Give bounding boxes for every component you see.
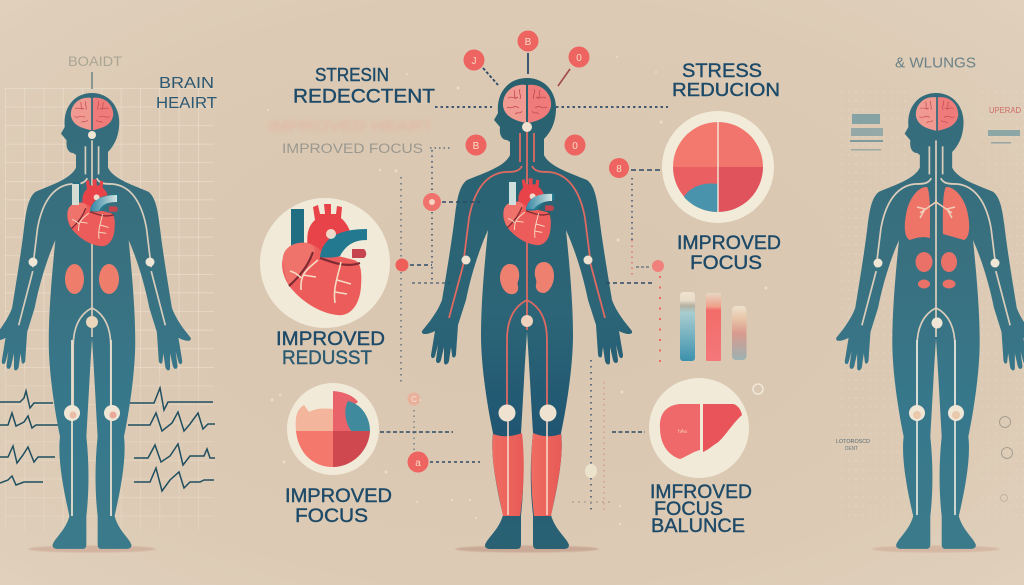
bronchi: [917, 200, 955, 218]
heading: STRESIN: STRESIN: [315, 65, 389, 85]
figure: left body (brain, heart, kidneys): [0, 93, 191, 553]
leg lines: [72, 340, 111, 516]
brain: [916, 97, 958, 131]
ground shadow: [455, 546, 599, 552]
small text: right panel right label: UPERAD: [989, 106, 1021, 115]
badge right of head: 0: [572, 141, 578, 152]
badge left of head: [466, 134, 486, 156]
icon: pie circle upper right: [662, 111, 774, 223]
sock lines: [508, 420, 547, 515]
brain: [503, 85, 551, 123]
pale vessels on heart: [72, 184, 117, 211]
background dots: right panel: [836, 90, 1024, 520]
label: IMPROVED (heart): IMPROVED: [276, 328, 385, 350]
heading: STRESS: STRESS: [682, 61, 762, 82]
ground shadow: [872, 546, 1000, 552]
badge near pie: 8: [616, 164, 622, 175]
lungs: [905, 187, 969, 240]
badge near pie: [609, 158, 629, 178]
joint dots: [874, 258, 1000, 421]
red vessels: [449, 127, 605, 405]
node right: [652, 260, 664, 272]
heart: [67, 179, 118, 246]
silhouette: [836, 93, 1024, 549]
background grid: left panel: [5, 88, 214, 530]
label: BALUNCE: BALUNCE: [651, 516, 745, 537]
heading: REDECCTENT: REDECCTENT: [293, 86, 435, 108]
joint dots: [462, 122, 592, 422]
ECG traces: right: [128, 388, 215, 491]
ECG traces: left: [0, 391, 58, 485]
label: HEAIRT: HEAIRT: [156, 95, 218, 112]
figure: centre body (brain, heart, red socks): [422, 78, 632, 552]
icon: heart in circle: [260, 198, 390, 328]
bar 1: [680, 292, 695, 361]
badge top left: J: [472, 56, 476, 67]
badge left of head: B: [473, 141, 480, 152]
icon: pie circle lower left: [287, 383, 379, 475]
label: IMFROVED (liver): IMFROVED: [650, 482, 752, 503]
icon: liver in circle: hAa: [678, 429, 687, 435]
kidneys: [916, 252, 957, 288]
icon: liver in circle: [649, 378, 749, 478]
joint dots: [28, 131, 154, 421]
speckles: [267, 56, 768, 525]
small text: right panel left label 2: DENT: [845, 446, 858, 452]
ground shadow: [28, 546, 156, 552]
pale node lower right: [585, 464, 597, 478]
heart: [503, 178, 554, 245]
node pale: C: [411, 395, 417, 404]
node with dot: [423, 193, 441, 211]
label: FOCUS (lower left): FOCUS: [295, 505, 368, 527]
ring: near liver: [753, 384, 763, 394]
faint label: IMPROVED FOCUS: IMPROVED FOCUS: [282, 141, 423, 156]
label: BOAIDT: BOAIDT: [68, 54, 122, 69]
figure: right body (brain, lungs, kidneys): [836, 93, 1024, 553]
silhouette: [0, 93, 191, 549]
red socks: [492, 433, 562, 516]
bar chart: [680, 292, 746, 361]
callout badges: [396, 30, 664, 478]
pale vessels on heart: [509, 182, 552, 209]
kidneys: [65, 264, 119, 294]
badge top centre: [518, 30, 538, 52]
leg lines: [917, 340, 955, 515]
label: REDUSST: REDUSST: [282, 348, 372, 369]
badge top left: [464, 50, 484, 70]
badge top right: [568, 46, 590, 68]
badge top centre: B: [525, 37, 532, 48]
small rings: right panel: [1000, 416, 1012, 502]
label: FOCUS (right): FOCUS: [690, 253, 762, 274]
label: & WLUNGS: & WLUNGS: [895, 56, 976, 72]
connector lines: [380, 53, 668, 510]
node pale: [408, 392, 420, 406]
badge bottom: a: [415, 458, 421, 469]
label: IMPROVED (right): IMPROVED: [677, 233, 781, 254]
badge top right: 0: [576, 53, 582, 64]
silhouette: [422, 78, 632, 549]
brain: [71, 98, 113, 130]
node left: [396, 258, 408, 272]
small tag blocks: right panel: [850, 114, 1020, 150]
faint pink text: IMPROVED HEART: [268, 118, 433, 135]
label: FOCUS (liver): FOCUS: [654, 499, 723, 520]
label: IMPROVED (lower left): IMPROVED: [285, 485, 392, 507]
vessels: [19, 140, 165, 410]
vessels: [862, 140, 1010, 410]
badge right of head: [564, 134, 586, 156]
bar 2: [706, 293, 721, 361]
kidneys: [500, 262, 554, 294]
label: BRAIN: BRAIN: [159, 75, 214, 92]
badge bottom: [408, 452, 428, 472]
heading: REDUCION: REDUCION: [672, 80, 780, 100]
marker under BOAIDT: [91, 72, 93, 89]
small text: right panel left label: LOTOROSCD: [836, 439, 870, 445]
bar 3: [732, 306, 746, 360]
